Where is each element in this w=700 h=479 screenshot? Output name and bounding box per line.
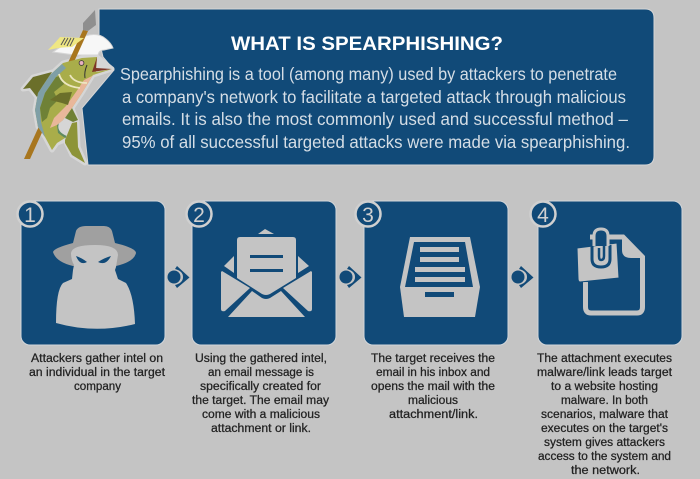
text: step 4: malware/link leads target — [537, 367, 673, 379]
body text: 95% of all successful targeted attacks were made via spearphishing. — [122, 132, 630, 152]
heading: WHAT IS SPEARPHISHING? — [231, 33, 503, 55]
text: step 3: attachment/link. — [389, 409, 478, 421]
text: step 2: attachment or link. — [211, 423, 311, 435]
fish belly — [50, 74, 96, 128]
text: step 2: an email message is — [208, 367, 314, 379]
text: step 3: The target receives the — [371, 353, 495, 365]
text: step 4 — [537, 353, 673, 477]
spear shaft — [24, 30, 88, 159]
badge 2 — [186, 202, 212, 227]
text: step 1 — [29, 353, 166, 393]
text: step 2 — [192, 353, 329, 435]
text: step 4: executes on the target's — [541, 423, 668, 435]
text: step 1: company — [74, 381, 121, 393]
text: step 1: an individual in the target — [29, 367, 166, 379]
arrow 3 — [512, 266, 534, 288]
badge 3: 3 — [362, 204, 374, 227]
text: step 4: malware. In both — [561, 395, 648, 407]
body text — [120, 64, 630, 152]
panel: step 1 — [18, 201, 165, 345]
icon: open envelope — [221, 229, 312, 317]
icon: inbox tray — [400, 237, 480, 317]
text: step 3 — [371, 353, 495, 421]
fish gill — [59, 74, 87, 88]
badge 4 — [530, 202, 556, 227]
panel: step 2 — [186, 201, 336, 345]
fish dark pattern — [40, 76, 64, 122]
white sail — [53, 35, 113, 55]
body text: Spearphishing is a tool (among many) used by attackers to penetrate — [120, 64, 617, 84]
header panel — [82, 9, 654, 165]
text: step 4: scenarios, malware that — [541, 409, 669, 421]
text: step 2: Using the gathered intel, — [195, 353, 327, 365]
yellow flag — [48, 37, 84, 50]
side fin — [50, 92, 72, 105]
body text: a company's network to facilitate a targeted attack through malicious — [122, 87, 626, 107]
text: step 4: system gives attackers — [544, 437, 665, 449]
text: step 2: specifically created for — [200, 381, 321, 393]
tail — [65, 122, 85, 163]
badge 1 — [18, 202, 42, 227]
text: step 1: Attackers gather intel on — [31, 353, 163, 365]
spear head — [83, 10, 96, 31]
fish body — [35, 57, 112, 150]
text: step 4: The attachment executes — [537, 353, 672, 365]
text: step 3: malicious — [408, 395, 458, 407]
arrow 1 — [168, 266, 190, 288]
fish tail curl — [57, 122, 66, 137]
fish back stripe — [35, 64, 66, 137]
rear fin — [65, 108, 78, 122]
badge 3 — [356, 202, 380, 227]
text: step 4: the network. — [571, 465, 640, 477]
panel: step 3 — [356, 201, 508, 345]
text: step 4: to a website hosting — [551, 381, 658, 393]
text: step 4: access to the system and — [538, 451, 671, 463]
dorsal fin — [23, 72, 52, 97]
badge 2: 2 — [193, 204, 205, 227]
icon: spy — [53, 226, 136, 329]
badge 4: 4 — [537, 204, 549, 227]
fish halo — [23, 57, 112, 163]
icon: document with paperclip — [577, 229, 645, 313]
text: step 2: the target. The email may — [192, 395, 329, 407]
text: step 2: come with a malicious — [202, 409, 320, 421]
badge 1: 1 — [24, 204, 36, 227]
icon: fish with spear — [23, 10, 113, 163]
text: step 3: opens the mail with the — [371, 381, 495, 393]
panel: step 4 — [530, 201, 682, 345]
fish eye — [79, 61, 84, 65]
fish mouth — [92, 57, 112, 72]
arrow 2 — [340, 266, 362, 288]
text: step 3: email in his inbox and — [376, 367, 490, 379]
body text: emails. It is also the most commonly used and successful method – — [122, 109, 628, 129]
